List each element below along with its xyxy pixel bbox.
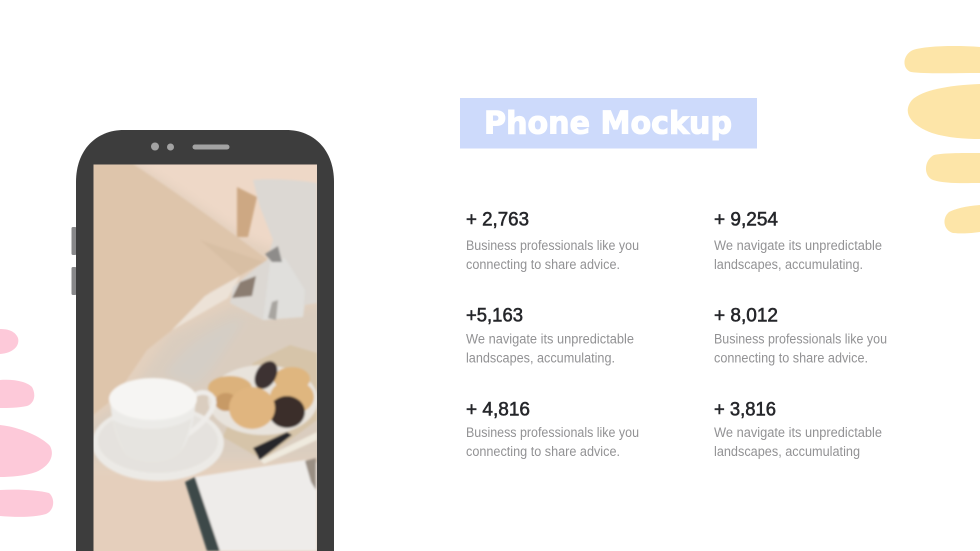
biscuits <box>272 366 311 386</box>
stat: + 8,012: connecting to share advice. <box>714 350 868 366</box>
phone body <box>76 130 334 551</box>
stat: + 4,816: Business professionals like you <box>466 425 639 440</box>
stat: + 9,254: + 9,254 <box>714 210 778 230</box>
stat: + 3,816: + 3,816 <box>714 400 776 420</box>
phone side buttons <box>72 227 76 295</box>
title text: Phone Mockup <box>484 106 732 142</box>
closed tan notebook <box>223 345 317 460</box>
decorative pink blobs, left edge <box>0 329 53 517</box>
stat: +5,163 <box>466 306 634 366</box>
stat: + 4,816: connecting to share advice. <box>466 444 620 459</box>
stat: + 3,816 <box>714 400 882 459</box>
title <box>460 98 757 148</box>
stat: + 2,763: connecting to share advice. <box>466 257 620 272</box>
decorative yellow blobs, top right <box>904 46 980 233</box>
stat: + 9,254: We navigate its unpredictable <box>714 238 882 253</box>
stat: +5,163: +5,163 <box>466 306 523 326</box>
pale blanket <box>230 179 317 320</box>
pillow <box>93 164 268 415</box>
stat: + 3,816: We navigate its unpredictable <box>714 425 882 440</box>
saucer <box>92 405 224 481</box>
phone screen photo: coffee cup, biscuits and notebook on a bed <box>94 164 317 551</box>
stat: + 9,254 <box>714 210 882 272</box>
phone camera and speaker <box>151 142 230 150</box>
stat: + 3,816: landscapes, accumulating <box>714 444 860 459</box>
open planner <box>185 477 220 551</box>
phone mockup <box>72 130 334 551</box>
stat: + 4,816 <box>466 400 639 459</box>
stat: +5,163: landscapes, accumulating. <box>466 350 615 366</box>
stat: + 4,816: + 4,816 <box>466 400 530 420</box>
stat: + 8,012: Business professionals like you <box>714 332 887 346</box>
stat: +5,163: We navigate its unpredictable <box>466 332 634 346</box>
stat: + 2,763: + 2,763 <box>466 210 529 230</box>
stat: + 9,254: landscapes, accumulating. <box>714 257 863 272</box>
plate <box>208 365 318 435</box>
stat: + 2,763: Business professionals like you <box>466 238 639 253</box>
stat: + 2,763 <box>466 210 639 272</box>
stat: + 8,012: + 8,012 <box>714 306 778 326</box>
coffee cup <box>188 392 214 434</box>
stat: + 8,012 <box>714 306 887 366</box>
title background <box>460 98 757 148</box>
